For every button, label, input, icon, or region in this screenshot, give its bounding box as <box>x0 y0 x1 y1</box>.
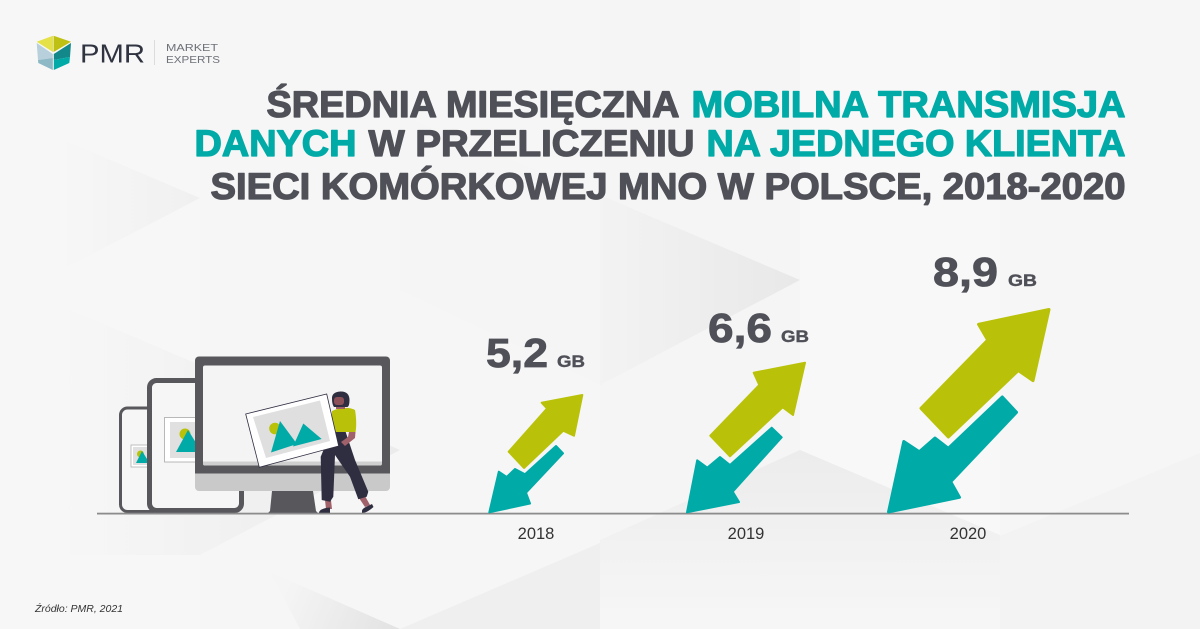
illustration: devices and person <box>120 356 390 514</box>
value 2019 <box>708 305 809 351</box>
title: NA JEDNEGO KLIENTA <box>706 123 1126 164</box>
year 2020: 2020 <box>950 525 986 543</box>
up arrow 2020 <box>921 310 1049 437</box>
tagline: MARKET <box>166 42 219 54</box>
up arrow 2018 <box>509 395 582 468</box>
value 2020: GB <box>1008 272 1037 290</box>
year 2019: 2019 <box>728 525 764 543</box>
axis line <box>97 513 1129 514</box>
title: SIECI KOMÓRKOWEJ MNO W POLSCE, 2018-2020 <box>210 165 1126 207</box>
bar: 2020 <box>888 310 1049 512</box>
icon: monitor <box>195 356 390 514</box>
picture frame <box>246 394 339 467</box>
value 2019: 6,6 <box>708 305 772 351</box>
title: ŚREDNIA MIESIĘCZNA <box>266 83 680 125</box>
source note: Źródło: PMR, 2021 <box>34 602 123 615</box>
value 2018 <box>486 330 585 376</box>
down arrow 2019 <box>687 428 782 512</box>
title: DANYCH <box>194 123 356 164</box>
bar: 2019 <box>687 363 805 512</box>
icon: cube <box>37 36 71 70</box>
title: MOBILNA TRANSMISJA <box>692 84 1126 125</box>
logo: PMR Market Experts: EXPERTS <box>166 54 220 66</box>
value 2018: 5,2 <box>486 330 548 376</box>
icon: tablet <box>150 380 242 510</box>
icon: phone <box>120 408 160 512</box>
value 2019: GB <box>781 328 809 346</box>
value 2020: 8,9 <box>933 249 998 295</box>
logo: PMR Market Experts <box>37 36 220 70</box>
year 2018: 2018 <box>518 525 554 543</box>
value 2020 <box>933 249 1037 295</box>
title <box>194 83 1126 207</box>
bar: 2018 <box>489 395 582 512</box>
down arrow 2020 <box>888 397 1016 512</box>
brand name: PMR <box>80 38 145 68</box>
value 2018: GB <box>557 353 585 371</box>
title: W PRZELICZENIU <box>368 123 694 164</box>
up arrow 2019 <box>710 363 805 456</box>
down arrow 2018 <box>489 446 563 512</box>
person <box>319 392 374 513</box>
